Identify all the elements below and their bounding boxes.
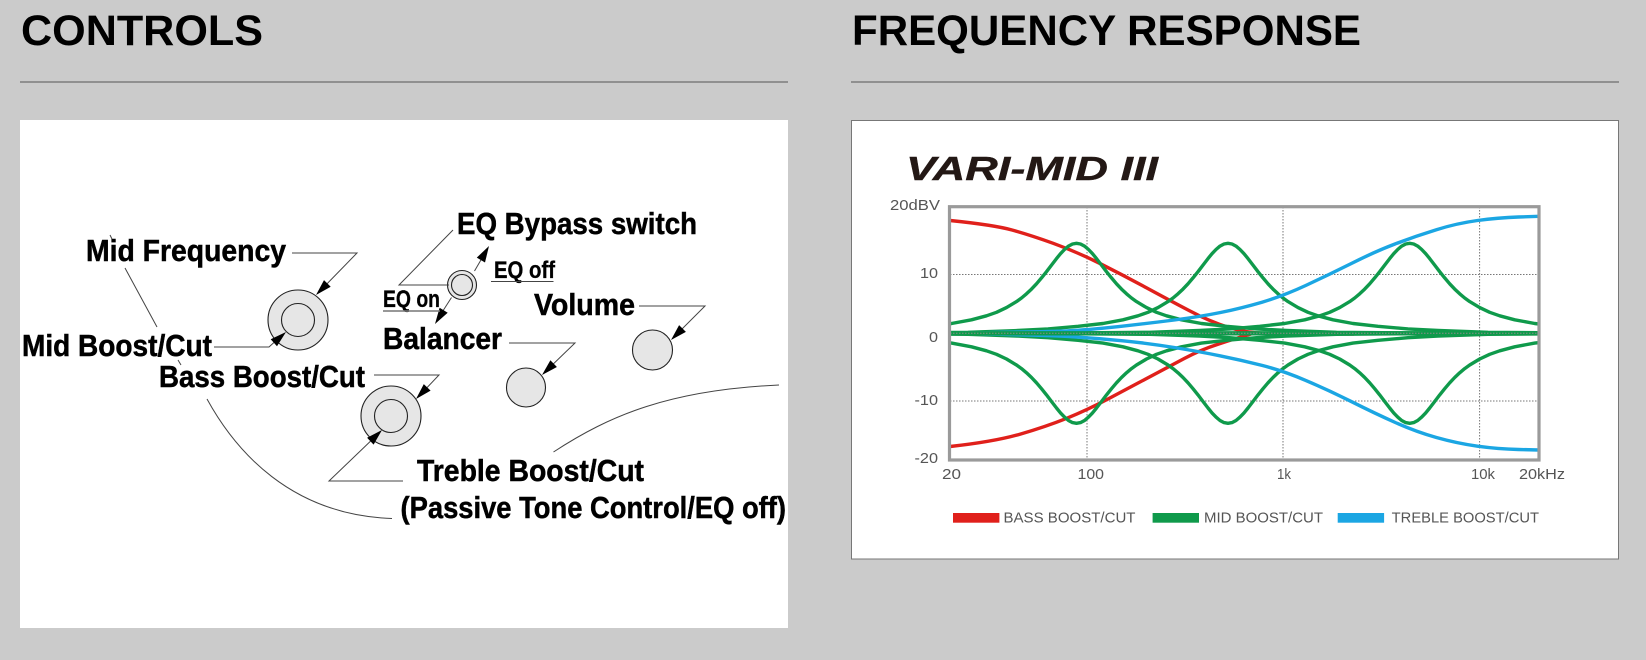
x axis labels: 20kHz: [1519, 466, 1565, 483]
x axis labels: 20: [942, 466, 961, 483]
zero line: [951, 331, 1426, 336]
text: mid frequency: Mid Frequency: [86, 234, 286, 268]
heading: controls: CONTROLS: [21, 7, 263, 55]
knob: mid frequency and mid boost/cut: [268, 290, 328, 350]
arrow: mid boost/cut leader: [214, 332, 286, 347]
legend: TREBLE BOOST/CUT: [1392, 511, 1539, 527]
title: VARI-MID III: VARI-MID III: [906, 150, 1159, 187]
text: balancer: Balancer: [383, 322, 502, 356]
treble boost curve: [950, 216, 1539, 333]
knob: bass and treble boost/cut: [361, 386, 421, 446]
y axis labels: 20dBV: [890, 197, 940, 214]
underline: EQ on: [383, 310, 440, 312]
body outline curves: [110, 235, 779, 518]
y axis labels: [890, 197, 940, 467]
x axis labels: 1k: [1277, 466, 1291, 483]
heading: frequency response: FREQUENCY RESPONSE: [852, 7, 1361, 55]
mid boost curves: [951, 242, 1538, 332]
text: EQ bypass switch: EQ Bypass switch: [457, 207, 697, 241]
y axis labels: 0: [929, 329, 938, 346]
y axis labels: -20: [914, 450, 938, 467]
arrow: EQ off direction: [474, 246, 489, 271]
knob: balancer: [506, 368, 546, 407]
legend: [953, 511, 1539, 527]
arrow: mid frequency leader: [292, 253, 357, 295]
underline: EQ off: [491, 280, 554, 282]
grid lines: [950, 207, 1539, 460]
text: bass boost/cut: Bass Boost/Cut: [159, 360, 365, 394]
bass boost curve: [950, 220, 1354, 334]
text: mid boost/cut: Mid Boost/Cut: [22, 329, 212, 363]
text: passive tone control: (Passive Tone Control/EQ off): [400, 491, 786, 525]
arrow: EQ bypass leader: [399, 230, 453, 285]
mid cut curves: [951, 336, 1538, 425]
panel: controls diagram: [20, 120, 788, 628]
legend: BASS BOOST/CUT: [1004, 511, 1136, 527]
bass cut curve: [950, 334, 1251, 446]
panel: frequency response chart: [851, 120, 1619, 560]
text: treble boost/cut: Treble Boost/Cut: [417, 454, 644, 488]
knob: volume: [632, 330, 672, 370]
arrow: treble boost/cut leader: [329, 430, 403, 481]
y axis labels: 10: [920, 265, 938, 282]
curves: [951, 214, 1538, 452]
arrow: balancer leader: [509, 343, 575, 375]
x axis labels: 10k: [1471, 466, 1495, 483]
text: volume: Volume: [534, 288, 635, 322]
arrow: bass boost/cut leader: [374, 375, 439, 399]
legend: MID BOOST/CUT: [1204, 511, 1323, 527]
text: EQ off: EQ off: [494, 257, 556, 284]
plot frame: [950, 207, 1539, 460]
arrow: volume leader: [639, 306, 705, 340]
switch: EQ bypass: [448, 270, 476, 300]
x axis labels: 100: [1078, 466, 1104, 483]
arrow: EQ on direction: [435, 298, 452, 324]
text: EQ on: EQ on: [383, 286, 440, 313]
x axis labels: [942, 466, 1565, 483]
y axis labels: -10: [914, 392, 938, 409]
treble cut curve: [950, 333, 1539, 450]
